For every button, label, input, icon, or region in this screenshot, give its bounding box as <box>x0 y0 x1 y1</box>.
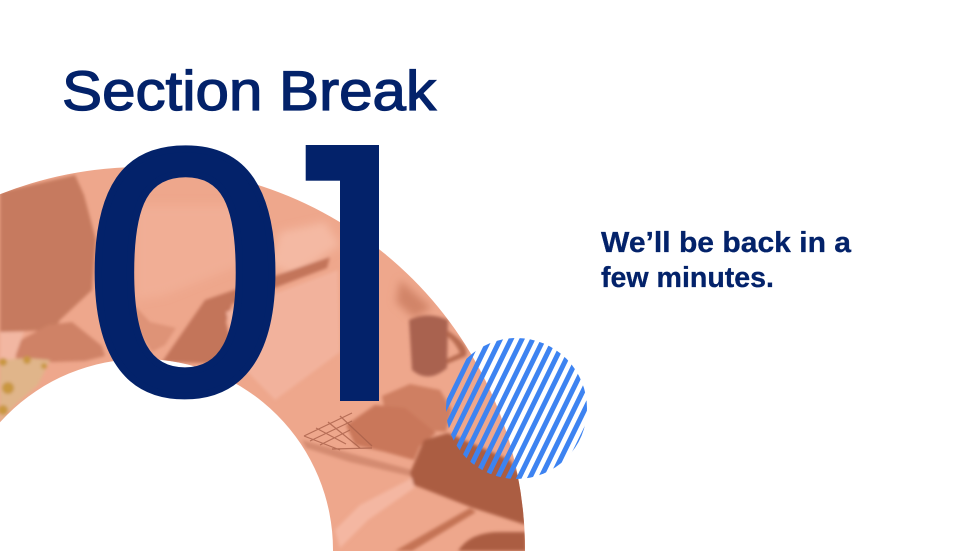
far hand <box>382 384 452 432</box>
left person shirt <box>0 175 96 332</box>
big number one <box>306 145 379 401</box>
flower blossoms <box>0 356 47 415</box>
heading: Section Break <box>62 59 437 122</box>
big number zero: 0 <box>84 78 286 467</box>
message line 1: We’ll be back in a <box>601 227 852 259</box>
message <box>601 227 852 294</box>
second hand <box>136 308 175 352</box>
laptop base edge <box>302 440 412 476</box>
flowers <box>0 358 50 422</box>
keyboard keys <box>304 413 372 450</box>
laptop lid <box>162 257 330 364</box>
slide <box>0 68 852 551</box>
message line 2: few minutes. <box>601 262 774 294</box>
shirt cuff <box>0 332 24 362</box>
near hand <box>346 405 436 460</box>
big number one: 1 <box>252 65 458 480</box>
left person hand <box>12 322 105 362</box>
white laptop <box>226 270 340 400</box>
mug <box>409 316 448 377</box>
blurred office background <box>135 205 432 318</box>
photo arc: people working at a desk with salmon tint <box>0 160 530 551</box>
notebook <box>335 478 414 548</box>
mug handle <box>447 330 467 364</box>
desk strip <box>395 508 476 551</box>
sleeve <box>410 433 526 525</box>
striped circle <box>446 338 587 479</box>
bottom dark object <box>458 532 526 551</box>
